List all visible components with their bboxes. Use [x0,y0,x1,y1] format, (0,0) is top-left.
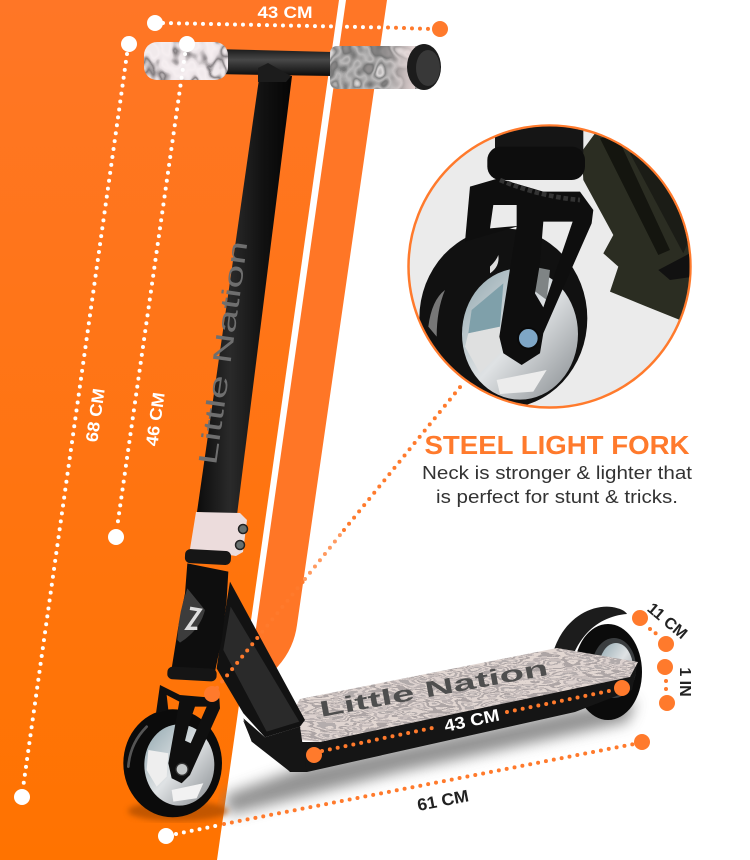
deck grip surface [278,648,638,742]
description text [422,463,692,507]
inset: wheel [419,228,587,408]
background: left orange panel [0,0,339,860]
inset: collar [487,147,585,180]
description text: Neck is stronger & lighter that [422,463,692,483]
inset: head tube [495,123,583,153]
inset: weld [500,180,580,200]
dimension: total height 68 cm: 68 CM [82,387,109,443]
dimension: total height 68 cm [14,36,137,805]
front wheel [123,709,222,817]
dimension: handlebar width 43 cm: 43 CM [258,3,312,22]
inset: axle bolt [519,329,538,348]
dimension: wheel 1 in [657,659,693,711]
down tube [217,582,307,772]
inset circle: steel fork detail [408,123,700,408]
head tube cut-out logo [177,588,205,643]
dimension: stem height 46 cm: 46 CM [142,391,169,447]
handlebar [144,42,441,90]
dimension: wheel 1 in: 1 IN [676,667,693,697]
deck side [243,662,638,772]
dimension: overall length 61 cm [158,734,650,844]
deck [243,648,638,772]
scooter [123,42,642,817]
dimension: wheel 11 cm: 11 CM [644,600,690,643]
bar end cap [407,44,441,90]
heading: steel light fork: STEEL LIGHT FORK [424,430,690,460]
ground shadow [128,700,636,821]
inset: fork [465,178,593,365]
deck logo text: Little Nation [317,655,550,722]
dimension: wheel 11 cm [632,600,690,652]
background: right orange panel [248,0,387,684]
stem tube [197,72,292,515]
left grip [144,42,228,80]
dimension: handlebar width 43 cm [147,3,448,37]
right grip [330,46,430,89]
stem clamp [190,512,248,556]
dimension: overall length 61 cm: 61 CM [416,786,470,815]
front axle bolt [176,763,188,775]
dimension: stem height 46 cm [108,36,195,545]
callout line: fork to inset [204,381,465,702]
rear wheel and fender [552,607,642,720]
description text: is perfect for stunt & tricks. [436,487,678,507]
front fork [156,685,220,783]
dimension: deck length 43 cm: 43 CM [442,706,501,736]
dimension: deck length 43 cm [306,680,630,763]
head tube [167,549,231,682]
inset: down tube [582,134,690,320]
stem logo text: Little Nation [192,239,253,467]
inset: silver hub [462,268,578,400]
